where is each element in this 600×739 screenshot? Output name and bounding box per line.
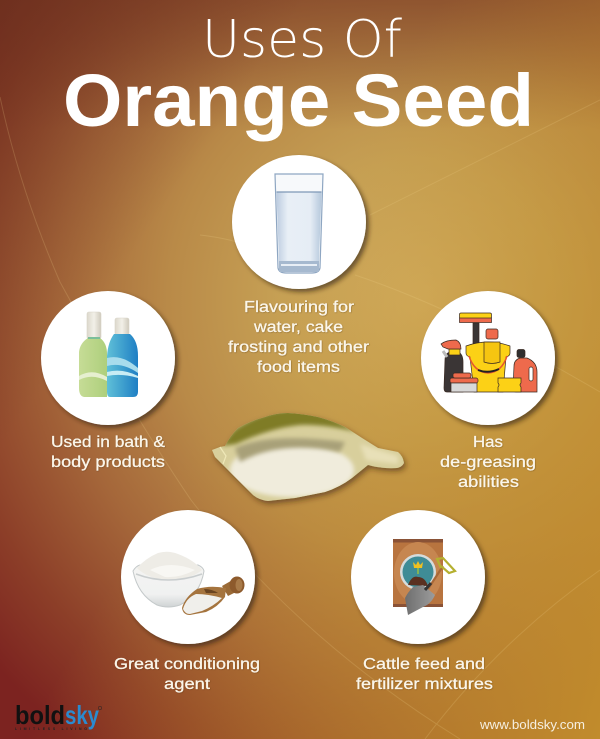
title line 2: Orange Seed [63,59,534,142]
panel: conditioning agent [114,510,260,693]
label: de-greasing [440,454,536,471]
label: Flavouring for [244,299,354,316]
icon: glass of water [275,174,323,273]
panel: de-greasing [421,291,555,491]
label: body products [51,454,165,471]
label: Great conditioning [114,656,260,673]
logo: boldsky: sky [65,700,99,730]
label [356,656,493,693]
icon: powder bowl and scoop [133,552,244,615]
label: abilities [458,474,519,491]
panel: cattle feed and fertilizer [351,510,493,693]
white circle [351,510,485,644]
label [228,299,369,376]
white circle [121,510,255,644]
label [440,434,536,491]
central orange seed image [212,410,404,501]
label: fertilizer mixtures [356,676,493,693]
title [63,10,534,142]
label: food items [257,359,340,376]
website url: www.boldsky.com [479,717,585,732]
logo: boldsky [15,700,102,731]
label: Used in bath & [51,434,166,451]
logo: boldsky: LIMITLESS LIVING [15,727,87,731]
label: agent [164,676,211,693]
icon: cleaning supplies [441,313,537,392]
white circle [232,155,366,289]
white circle [41,291,175,425]
logo: boldsky: bold [15,700,65,730]
icon: lotion bottles [79,312,138,397]
label [114,656,260,693]
label: Has [473,434,503,451]
label: water, cake [253,319,343,336]
panel: flavouring for water [228,155,369,376]
title line 1: Uses Of [202,10,403,70]
label: Cattle feed and [363,656,485,673]
white circle [421,291,555,425]
icon: fertilizer bag and shovel [393,539,455,615]
label: frosting and other [228,339,369,356]
panel: bath and body products [41,291,175,471]
label [51,434,166,471]
